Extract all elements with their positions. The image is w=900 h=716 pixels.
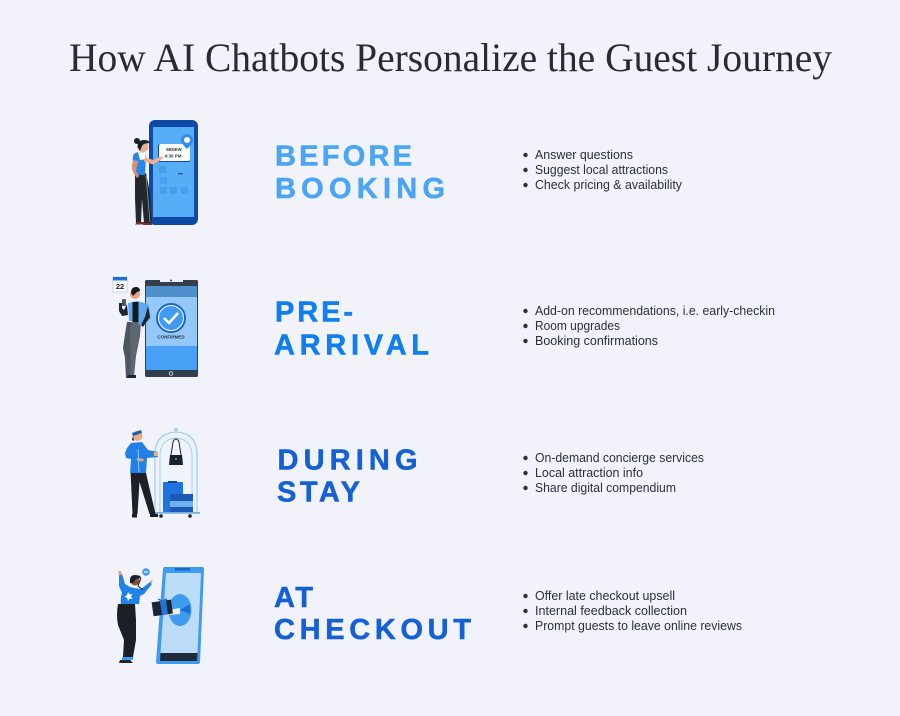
icon: man beside phone showing confirmed check: CONFIRMED bbox=[157, 334, 185, 340]
icon: woman at phone with location pin: 4:30 PM bbox=[164, 154, 182, 158]
icon: man beside phone showing confirmed check: 22 bbox=[116, 282, 124, 291]
heading: pre-arrival: ARRIVAL bbox=[274, 330, 429, 362]
list: pre-arrival actions bbox=[523, 303, 775, 348]
list: pre-arrival actions: Add-on recommendations, i.e. early-checkin bbox=[535, 303, 775, 318]
list: pre-arrival actions: Room upgrades bbox=[535, 318, 620, 333]
list: pre-arrival actions: Booking confirmations bbox=[535, 333, 658, 348]
heading: during stay bbox=[277, 444, 418, 508]
icon: woman receiving gift from phone bbox=[117, 567, 204, 664]
list: at checkout actions bbox=[523, 588, 742, 633]
list: before booking actions: Answer questions bbox=[535, 147, 633, 162]
heading: at checkout: AT bbox=[274, 582, 313, 614]
icon: man beside phone showing confirmed check bbox=[113, 277, 198, 378]
list: during stay actions: Local attraction info bbox=[535, 465, 643, 480]
list: at checkout actions: Offer late checkout upsell bbox=[535, 588, 675, 603]
heading: pre-arrival bbox=[274, 296, 429, 362]
icon: woman at phone with location pin bbox=[132, 120, 198, 225]
icon: woman at phone with location pin: MDIEW bbox=[166, 147, 182, 152]
heading: before booking bbox=[275, 140, 445, 205]
list: before booking actions: Suggest local attractions bbox=[535, 162, 668, 177]
heading: at checkout: CHECKOUT bbox=[274, 614, 471, 646]
icon: bellhop with luggage cart bbox=[125, 428, 200, 518]
heading: at checkout bbox=[274, 582, 471, 646]
list: during stay actions bbox=[523, 450, 704, 495]
heading: during stay: STAY bbox=[277, 476, 360, 508]
list: before booking actions: Check pricing & availability bbox=[535, 177, 683, 192]
panel: during stay bbox=[125, 428, 704, 518]
title: How AI Chatbots Personalize the Guest Journey bbox=[69, 35, 833, 80]
heading: before booking: BEFORE bbox=[275, 140, 412, 172]
list: before booking actions bbox=[523, 147, 683, 192]
heading: during stay: DURING bbox=[278, 444, 418, 476]
panel: pre-arrival bbox=[113, 277, 775, 378]
panel: before booking bbox=[132, 120, 683, 225]
heading: before booking: BOOKING bbox=[275, 173, 445, 205]
panel: at checkout bbox=[117, 567, 742, 664]
list: at checkout actions: Internal feedback collection bbox=[535, 603, 687, 618]
list: during stay actions: Share digital compendium bbox=[535, 480, 676, 495]
heading: pre-arrival: PRE- bbox=[275, 296, 353, 328]
list: at checkout actions: Prompt guests to leave online reviews bbox=[535, 618, 742, 633]
list: during stay actions: On-demand concierge services bbox=[535, 450, 704, 465]
